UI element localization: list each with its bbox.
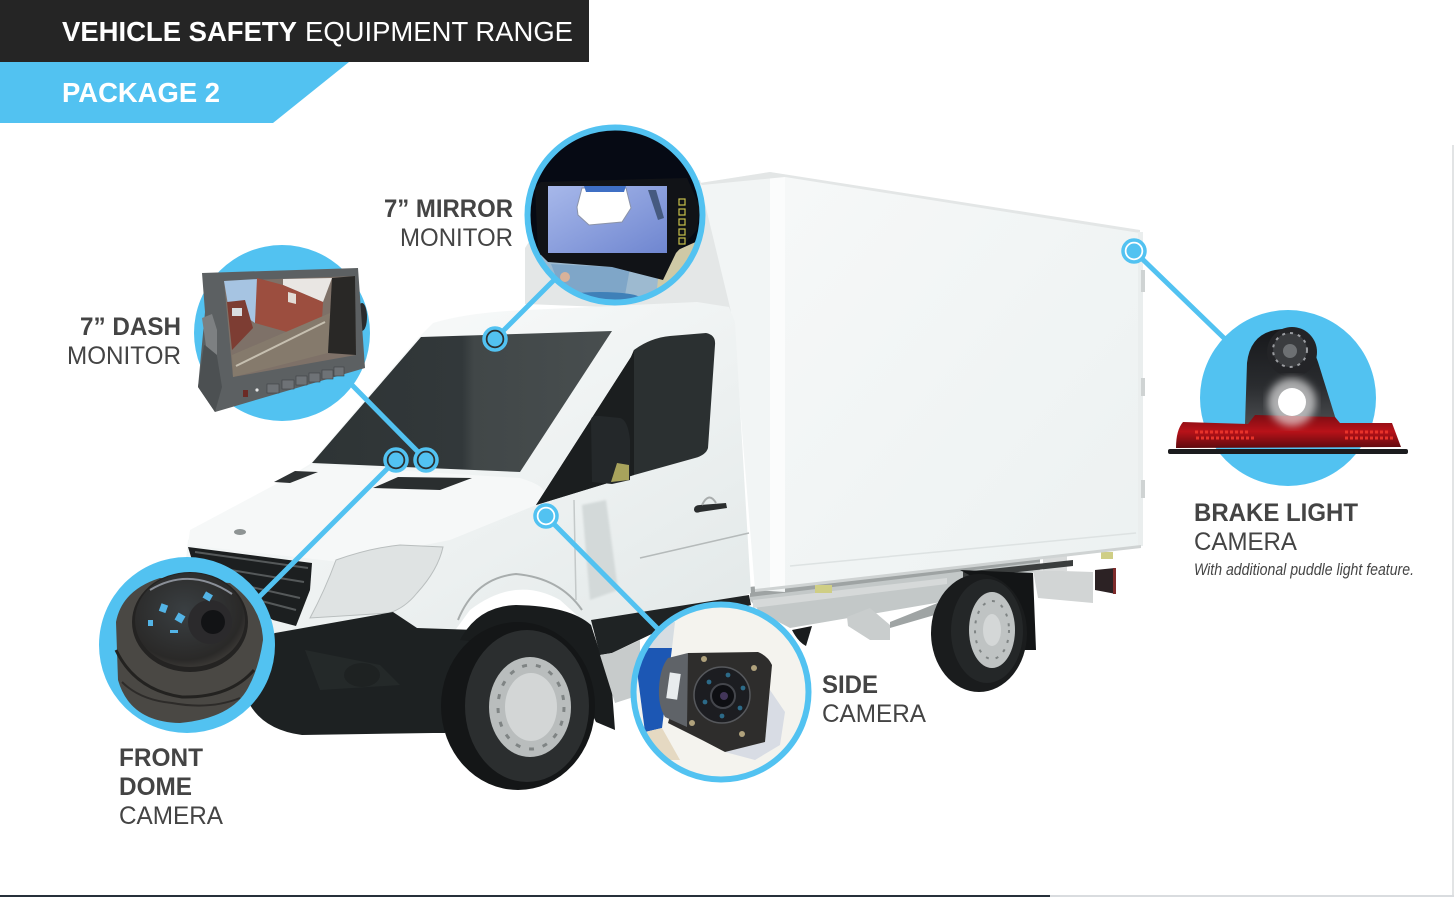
rear chassis and tow bar xyxy=(750,552,1116,646)
label: 7 inch mirror monitor xyxy=(384,195,513,252)
label: 7 inch dash monitor: 7” DASH xyxy=(80,313,181,341)
hood highlight xyxy=(188,465,545,562)
package label: PACKAGE 2 xyxy=(62,77,220,108)
door handle xyxy=(694,497,727,513)
black lower bumper xyxy=(250,612,476,735)
callout: dash monitor xyxy=(194,245,370,421)
front wheel xyxy=(441,622,595,790)
label: 7 inch dash monitor xyxy=(67,313,181,370)
label: brake light camera: BRAKE LIGHT xyxy=(1194,499,1358,527)
header: title bar xyxy=(0,0,589,62)
label: side camera: SIDE xyxy=(822,671,878,699)
callout: front dome camera xyxy=(99,557,275,733)
truck illustration xyxy=(186,172,1145,790)
fog lamp xyxy=(344,663,380,687)
grille xyxy=(188,547,312,626)
badge xyxy=(234,529,246,535)
connector dots xyxy=(385,240,1145,527)
title xyxy=(62,16,573,47)
label: 7 inch mirror monitor: MONITOR xyxy=(400,224,513,252)
cab body xyxy=(186,302,751,640)
wheel arch trim xyxy=(458,574,582,620)
label: front dome camera: CAMERA xyxy=(119,802,223,830)
callout: mirror monitor xyxy=(525,125,705,310)
label: front dome camera: DOME xyxy=(119,773,192,801)
header: package ribbon xyxy=(0,62,349,123)
wing mirror xyxy=(591,416,630,484)
roof fairing behind cab xyxy=(525,180,735,312)
side windows xyxy=(536,333,715,505)
label: front dome camera: FRONT xyxy=(119,744,203,772)
arch and sill xyxy=(460,605,615,730)
label: 7 inch mirror monitor: 7” MIRROR xyxy=(384,195,513,223)
windshield xyxy=(312,331,612,472)
label: brake light camera: CAMERA xyxy=(1194,528,1297,556)
callout: brake light camera xyxy=(1168,310,1408,486)
monitor screen xyxy=(224,276,356,377)
cargo box xyxy=(700,172,1145,592)
door shading xyxy=(582,500,618,600)
callout: side camera xyxy=(630,600,815,785)
note: puddle light: With additional puddle light feature. xyxy=(1194,560,1414,579)
label: brake light camera xyxy=(1194,499,1414,579)
label: front dome camera xyxy=(119,744,223,830)
connector lines xyxy=(258,251,1226,633)
rear wheel xyxy=(931,570,1036,692)
title: VEHICLE SAFETY xyxy=(62,16,297,47)
label: side camera xyxy=(822,671,926,728)
headlight xyxy=(310,545,443,618)
title: EQUIPMENT RANGE xyxy=(305,16,573,47)
label: 7 inch dash monitor: MONITOR xyxy=(67,342,181,370)
hood vents xyxy=(274,471,472,490)
label: side camera: CAMERA xyxy=(822,700,926,728)
